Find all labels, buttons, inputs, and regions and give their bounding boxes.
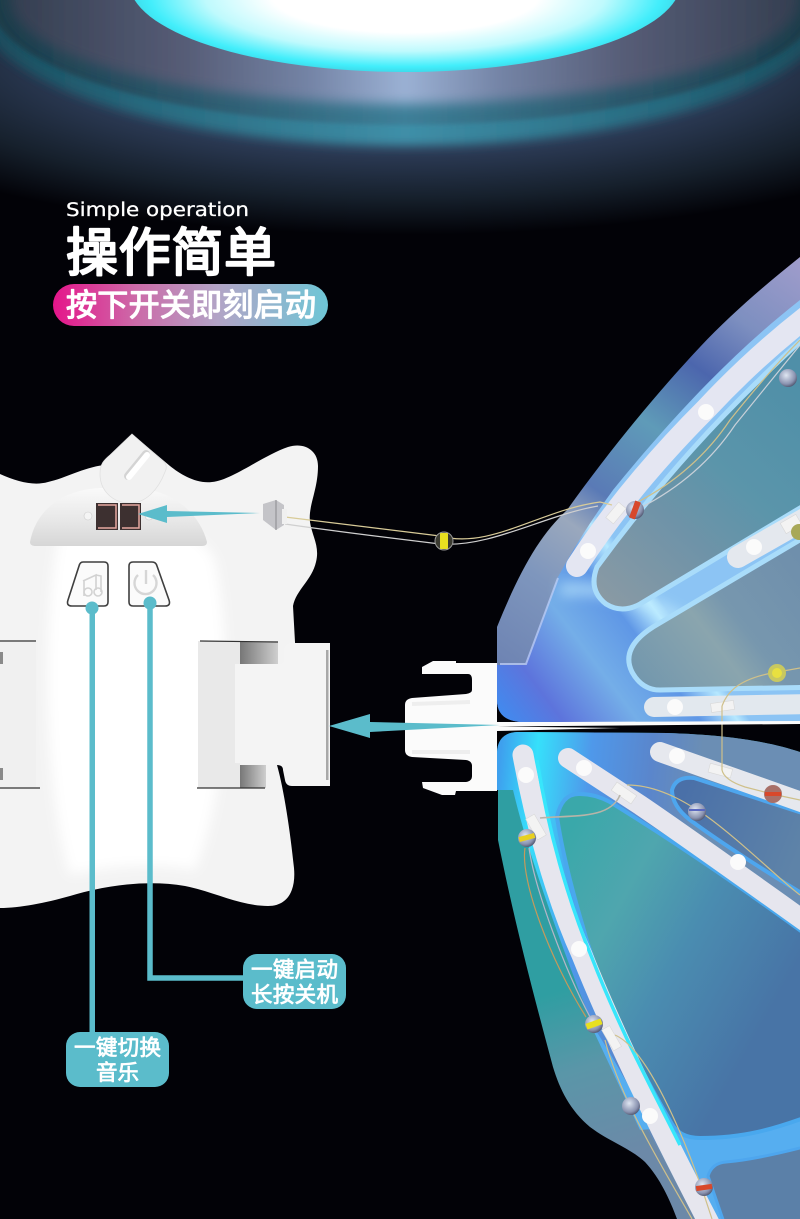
rib clips bbox=[606, 502, 800, 712]
body shell bbox=[0, 434, 318, 908]
white clip connector bbox=[405, 661, 800, 795]
red bead bottom bbox=[695, 1178, 713, 1196]
bottom right opening bbox=[708, 1140, 800, 1219]
yellow bead upper right bbox=[768, 664, 786, 682]
yellow bead bbox=[435, 532, 453, 550]
rib strips bbox=[577, 314, 800, 707]
opening 1 bbox=[594, 315, 800, 609]
glow frame bbox=[497, 300, 800, 722]
callout: music bbox=[66, 1031, 169, 1087]
English subtitle: Simple operation bbox=[66, 200, 249, 221]
product body: white control box bbox=[0, 434, 330, 908]
rib rivets bbox=[580, 404, 762, 715]
glow frame bbox=[497, 732, 800, 1219]
strap buckle tab bbox=[235, 643, 330, 786]
right strap slot bbox=[197, 641, 278, 788]
music button bbox=[68, 562, 108, 606]
callout: music: 一键切换 bbox=[74, 1031, 161, 1062]
connector plug bbox=[263, 500, 287, 530]
connector dome plate bbox=[30, 488, 207, 546]
callout: power: 一键启动 bbox=[251, 953, 338, 984]
callout: music: 音乐 bbox=[96, 1056, 139, 1087]
pill tagline: 按下开关即刻启动 bbox=[66, 280, 316, 325]
yellow bead lower left bbox=[518, 829, 536, 847]
rib strips bbox=[523, 752, 800, 1219]
red bead lower right bbox=[764, 785, 782, 803]
opening 2 bbox=[629, 522, 800, 690]
rib rivets bbox=[518, 748, 746, 1124]
cyan edge on strip bbox=[537, 760, 680, 1145]
callout: power bbox=[243, 953, 346, 1009]
blue bead bottom bbox=[622, 1097, 640, 1115]
main title: 操作简单 bbox=[66, 211, 276, 286]
wiring and LED beads bbox=[263, 340, 800, 1219]
leader: music button bbox=[86, 602, 98, 1034]
outer teal wing bbox=[497, 732, 800, 1219]
socket bbox=[84, 503, 153, 530]
leader: power button bbox=[144, 596, 245, 978]
outer translucent wing bbox=[497, 257, 800, 724]
upper right opening bbox=[672, 778, 800, 910]
heading group bbox=[53, 200, 328, 326]
blue bead lower bbox=[688, 803, 706, 821]
wing: lower bbox=[497, 732, 800, 1219]
red bead bbox=[626, 501, 644, 519]
main opening bbox=[557, 794, 800, 1138]
power button bbox=[129, 562, 170, 606]
rib clips bbox=[526, 763, 733, 1051]
yellow bead right edge bbox=[791, 524, 800, 540]
top latch tab bbox=[100, 434, 166, 503]
arrow: plug to socket bbox=[138, 505, 260, 523]
left strap slot bbox=[0, 640, 40, 788]
blue bead upper bbox=[779, 369, 797, 387]
arrow: clip to buckle bbox=[329, 714, 500, 738]
top light glow bbox=[0, 0, 800, 235]
yellow bead middle bbox=[585, 1015, 603, 1033]
wing: upper bbox=[497, 257, 800, 724]
callout: power: 长按关机 bbox=[251, 978, 338, 1009]
wires bbox=[285, 340, 800, 1219]
